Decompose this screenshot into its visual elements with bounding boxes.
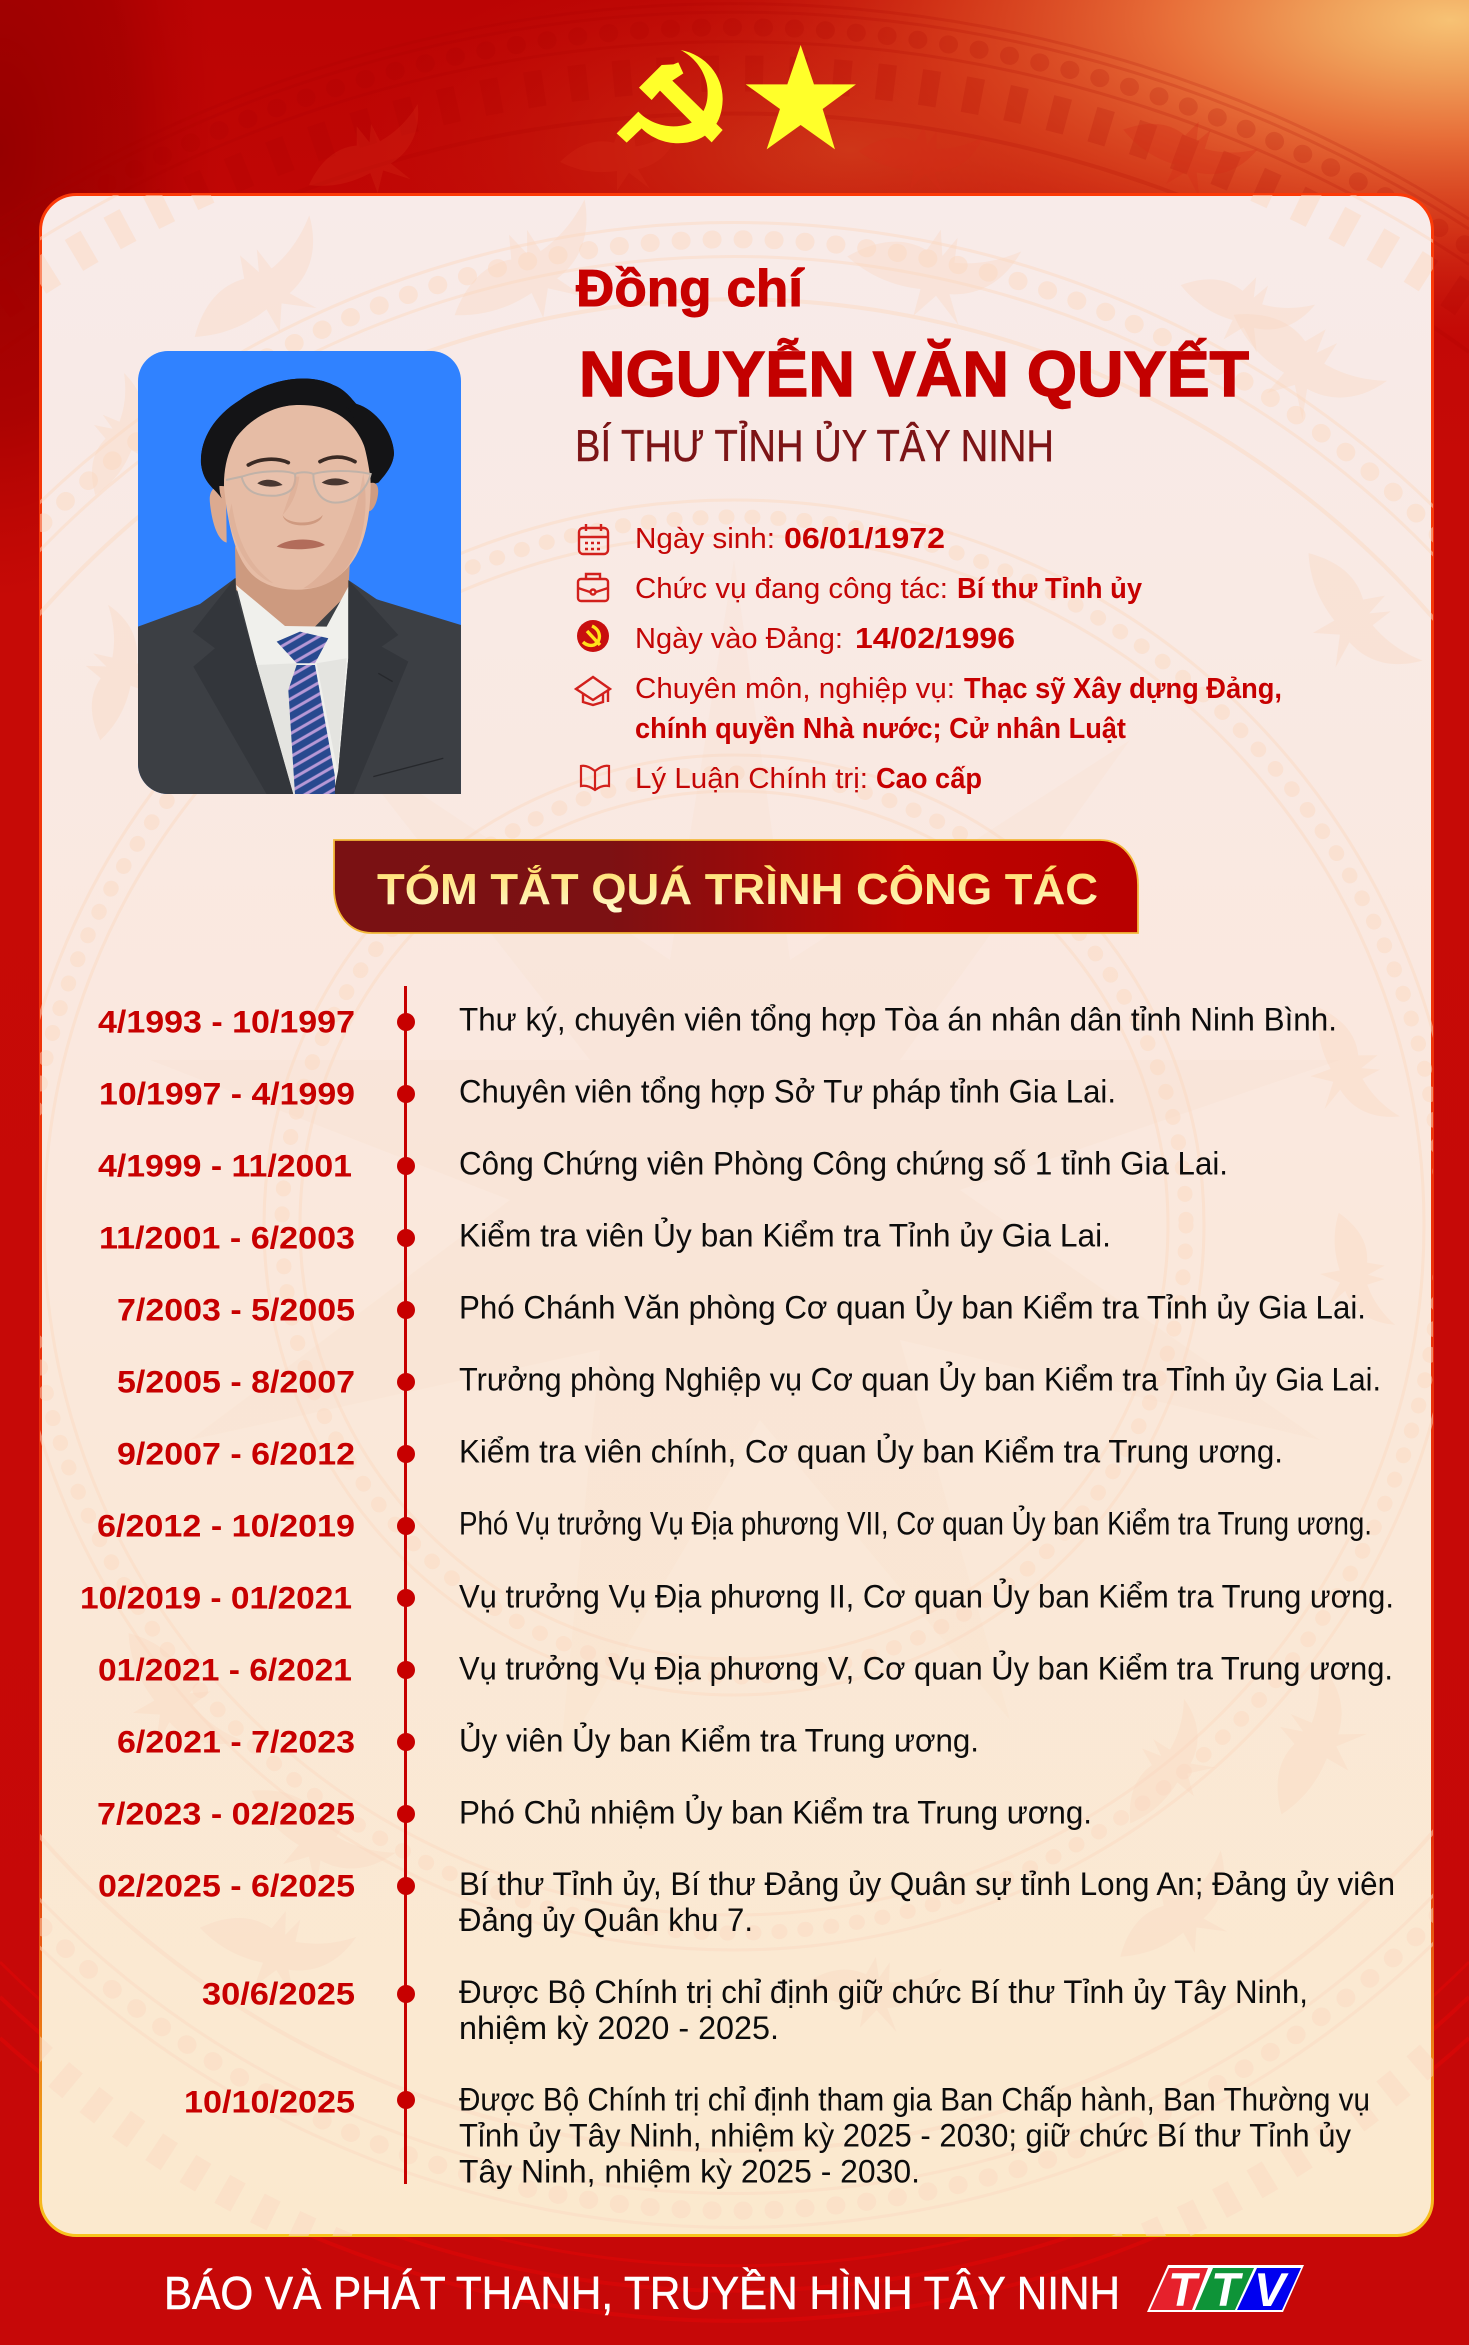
timeline descriptions: Thư ký, chuyên viên tổng hợp Tòa án nhân dân tỉnh Ninh Bình. [459, 1002, 1337, 1038]
neck [235, 547, 351, 628]
timeline dates: 5/2005 - 8/2007 [117, 1364, 355, 1400]
timeline dates: 11/2001 - 6/2003 [99, 1220, 355, 1256]
icon: hammer and sickle [617, 50, 723, 143]
info: political theory [635, 763, 982, 795]
timeline descriptions: Bí thư Tỉnh ủy, Bí thư Đảng ủy Quân sự tỉnh Long An; Đảng ủy viên [459, 1866, 1395, 1902]
info: current position [635, 573, 1142, 605]
nose [283, 515, 323, 525]
lapels [193, 578, 293, 794]
timeline descriptions: Kiểm tra viên chính, Cơ quan Ủy ban Kiểm tra Trung ương. [459, 1434, 1283, 1470]
heading: name: NGUYỄN VĂN QUYẾT [579, 338, 1249, 410]
timeline descriptions: Vụ trưởng Vụ Địa phương II, Cơ quan Ủy ban Kiểm tra Trung ương. [459, 1578, 1394, 1614]
timeline descriptions: nhiệm kỳ 2020 - 2025. [459, 2010, 779, 2046]
timeline descriptions: Chuyên viên tổng hợp Sở Tư pháp tỉnh Gia Lai. [459, 1074, 1116, 1110]
icon: yellow star [746, 45, 856, 149]
info: party date [635, 623, 1015, 655]
logo: TTV: V [1254, 2263, 1289, 2316]
timeline descriptions: Đảng ủy Quân khu 7. [459, 1902, 753, 1938]
timeline descriptions: Được Bộ Chính trị chỉ định giữ chức Bí thư Tỉnh ủy Tây Ninh, [459, 1974, 1308, 2010]
info: political theory: Lý Luận Chính trị: [635, 763, 868, 795]
timeline descriptions: Phó Chánh Văn phòng Cơ quan Ủy ban Kiểm tra Tỉnh ủy Gia Lai. [459, 1290, 1366, 1326]
eyebrows [248, 457, 355, 465]
ears [210, 486, 227, 543]
icon: calendar [579, 524, 608, 554]
info: political theory: Cao cấp [876, 763, 982, 795]
info: birthday [635, 523, 945, 555]
timeline descriptions [459, 1002, 1395, 2190]
timeline dates: 6/2021 - 7/2023 [117, 1724, 355, 1760]
timeline dates: 7/2003 - 5/2005 [117, 1292, 355, 1328]
timeline dates: 10/2019 - 01/2021 [80, 1580, 352, 1616]
info: expertise: Chuyên môn, nghiệp vụ: [635, 673, 955, 705]
timeline descriptions: Được Bộ Chính trị chỉ định tham gia Ban Chấp hành, Ban Thường vụ [459, 2082, 1370, 2118]
timeline dates: 10/10/2025 [184, 2084, 355, 2120]
portrait photo [138, 351, 461, 794]
timeline [80, 986, 1395, 2190]
info: current position: Chức vụ đang công tác: [635, 573, 948, 605]
icon: graduation cap [576, 677, 610, 705]
info: current position: Bí thư Tỉnh ủy [957, 573, 1142, 605]
timeline dates [80, 1004, 355, 2120]
timeline descriptions: Công Chứng viên Phòng Công chứng số 1 tỉnh Gia Lai. [459, 1146, 1228, 1182]
section banner [334, 840, 1138, 933]
timeline dates: 01/2021 - 6/2021 [98, 1652, 352, 1688]
icon: open book [581, 766, 609, 790]
back hair [201, 379, 394, 498]
info: birthday: Ngày sinh: [635, 523, 775, 555]
timeline descriptions: Trưởng phòng Nghiệp vụ Cơ quan Ủy ban Kiểm tra Tỉnh ủy Gia Lai. [459, 1362, 1381, 1398]
heading: position: BÍ THƯ TỈNH ỦY TÂY NINH [575, 420, 1054, 471]
eyes [257, 478, 349, 487]
logo: TTV: T [1211, 2263, 1244, 2316]
info: expertise [635, 673, 1282, 745]
timeline descriptions: Phó Chủ nhiệm Ủy ban Kiểm tra Trung ương. [459, 1794, 1092, 1830]
footer text: BÁO VÀ PHÁT THANH, TRUYỀN HÌNH TÂY NINH [164, 2267, 1120, 2319]
timeline dates: 10/1997 - 4/1999 [99, 1076, 355, 1112]
info: expertise: Thạc sỹ Xây dựng Đảng, [964, 673, 1282, 705]
striped tie [277, 632, 335, 794]
mouth [277, 540, 325, 549]
front hair [201, 379, 394, 498]
timeline dates: 6/2012 - 10/2019 [97, 1508, 355, 1544]
suit jacket [138, 578, 461, 794]
glasses [226, 471, 371, 503]
timeline dates: 02/2025 - 6/2025 [98, 1868, 355, 1904]
timeline axis [404, 986, 407, 2184]
timeline descriptions: Ủy viên Ủy ban Kiểm tra Trung ương. [459, 1722, 979, 1758]
timeline dates: 4/1999 - 11/2001 [98, 1148, 352, 1184]
icon: party emblem [577, 620, 609, 652]
logo: TTV [1147, 2263, 1304, 2316]
face [224, 405, 371, 590]
timeline dates: 9/2007 - 6/2012 [117, 1436, 355, 1472]
timeline dots [397, 1013, 415, 2109]
info list [576, 523, 1282, 795]
icon: briefcase [578, 574, 608, 601]
timeline dates: 30/6/2025 [202, 1976, 355, 2012]
info: party date: 14/02/1996 [855, 623, 1015, 655]
timeline dates: 7/2023 - 02/2025 [97, 1796, 355, 1832]
info: birthday: 06/01/1972 [784, 523, 945, 555]
timeline dates: 4/1993 - 10/1997 [98, 1004, 355, 1040]
info: party date: Ngày vào Đảng: [635, 623, 843, 655]
logo: TTV: T [1168, 2263, 1201, 2316]
info: expertise: chính quyền Nhà nước; Cử nhân Luật [635, 713, 1126, 745]
heading: Đồng chí: Đồng chí [576, 260, 805, 318]
timeline descriptions: Tây Ninh, nhiệm kỳ 2025 - 2030. [459, 2154, 920, 2190]
timeline descriptions: Tỉnh ủy Tây Ninh, nhiệm kỳ 2025 - 2030; giữ chức Bí thư Tỉnh ủy [459, 2118, 1351, 2154]
section banner: TÓM TẮT QUÁ TRÌNH CÔNG TÁC [377, 863, 1098, 914]
timeline descriptions: Kiểm tra viên Ủy ban Kiểm tra Tỉnh ủy Gia Lai. [459, 1218, 1111, 1254]
white shirt [236, 585, 348, 794]
timeline descriptions: Vụ trưởng Vụ Địa phương V, Cơ quan Ủy ban Kiểm tra Trung ương. [459, 1650, 1393, 1686]
